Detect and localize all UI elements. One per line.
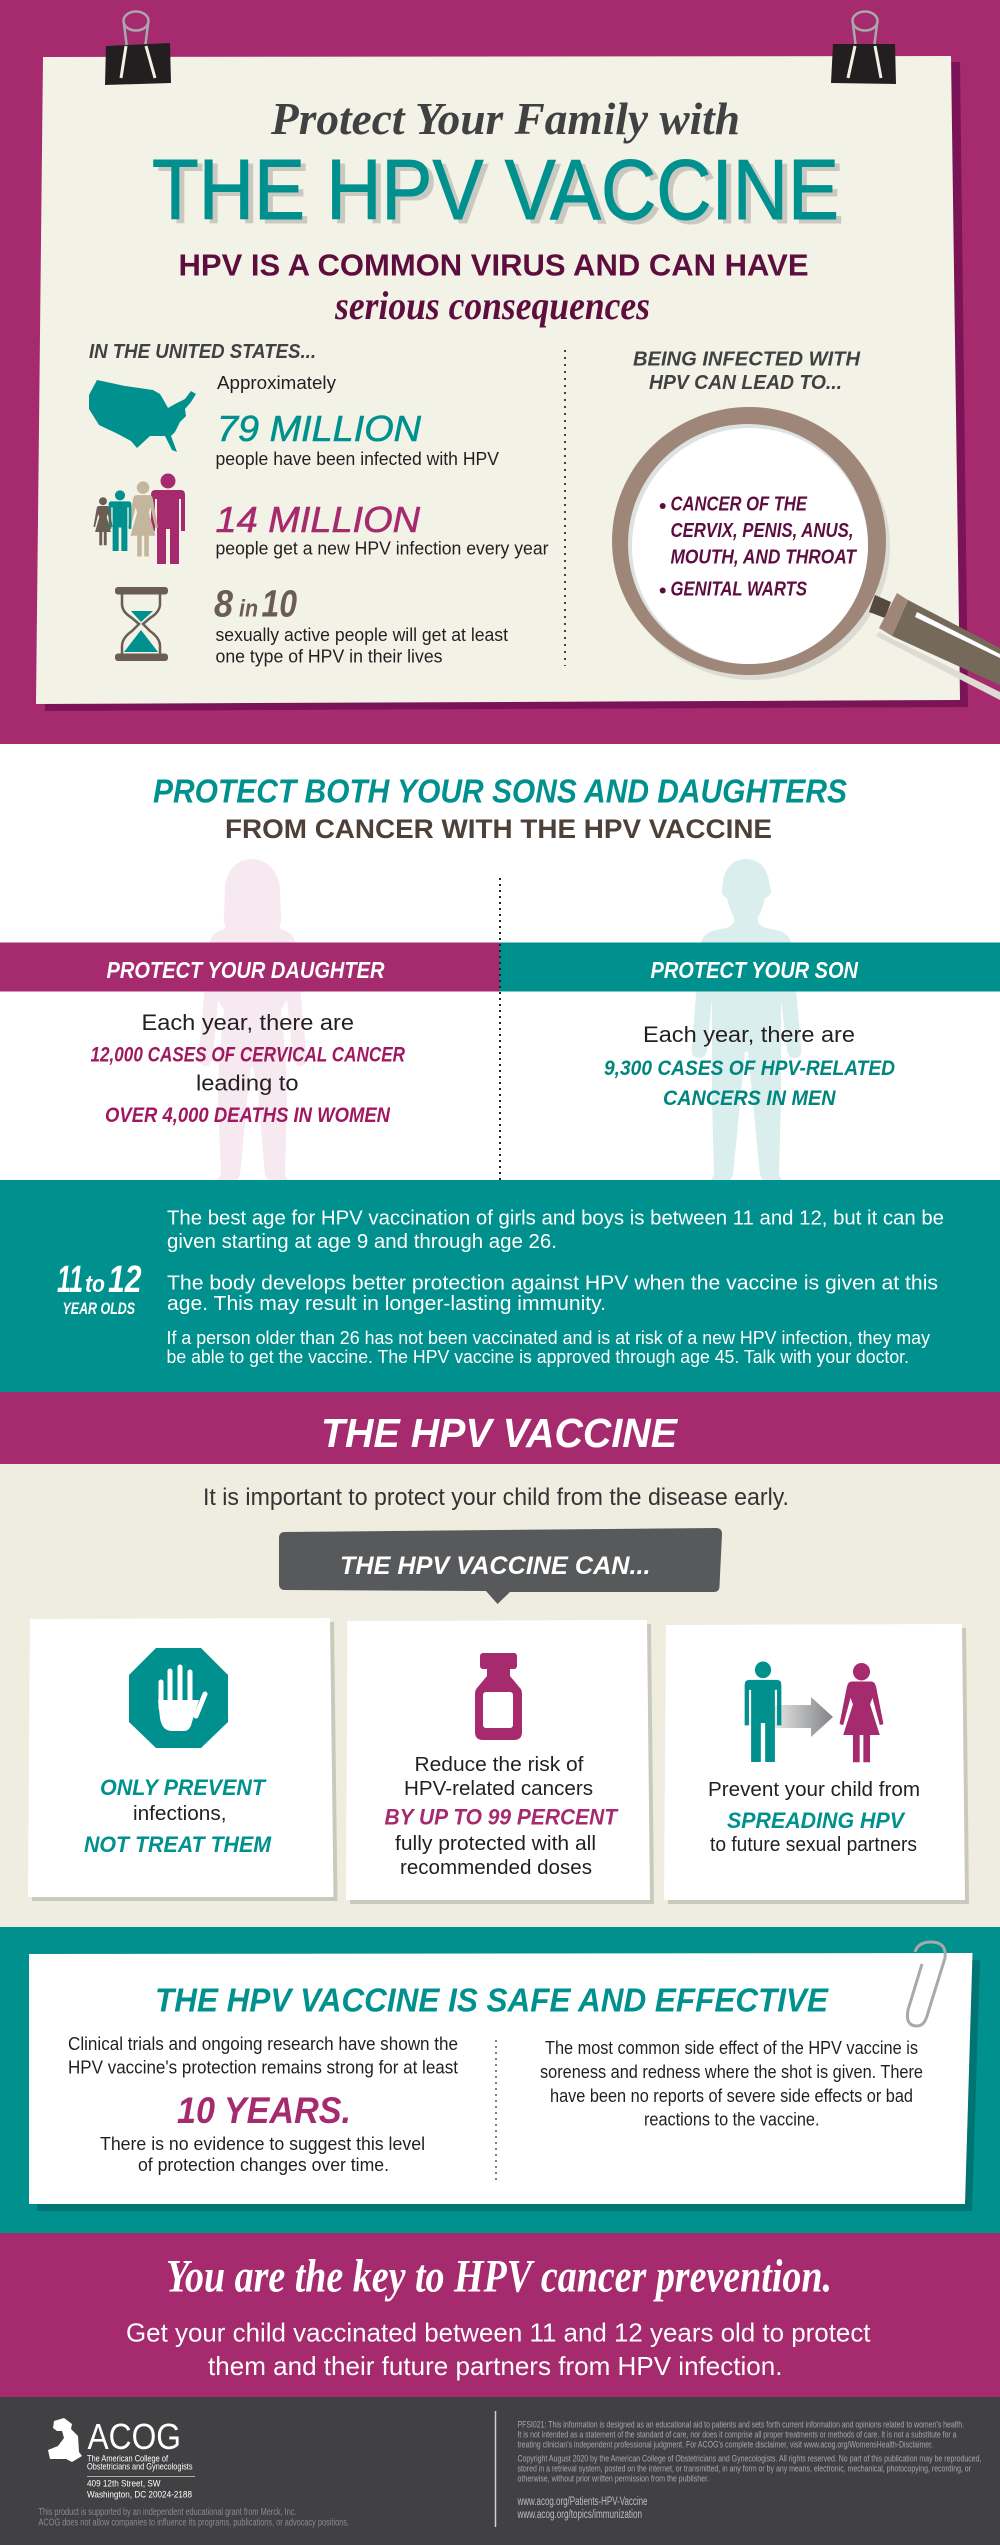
text: only prevent infections: infections, [133, 1803, 226, 1825]
text: son statistics: CANCERS IN MEN [663, 1087, 836, 1110]
text: better protection [167, 1272, 938, 1315]
stat: 14 million: 14 MILLION [216, 499, 421, 540]
icon: mother and child emblem [48, 2418, 82, 2462]
text: get your child vaccinated: them and their future partners from HPV infection. [208, 2351, 782, 2381]
stat: 11 to 12 year olds: YEAR OLDS [62, 1299, 135, 1318]
text: older than 26: be able to get the vaccine. The HPV vaccine is approved through age 45. Talk with your doctor. [166, 1347, 909, 1367]
subtitle: common virus: HPV IS A COMMON VIRUS AND CAN HAVE [178, 248, 809, 282]
logo: ACOG: 409 12th Street, SW [87, 2478, 161, 2490]
paper note [36, 56, 960, 704]
text: no evidence: There is no evidence to suggest this level [100, 2134, 425, 2154]
panel: protect both sons and daughters [0, 744, 1000, 1180]
title: The HPV Vaccine: THE HPV VACCINE [157, 147, 844, 242]
subtitle: serious consequences: serious consequences [334, 283, 650, 328]
icon: family of four [93, 474, 185, 564]
text: side effects: soreness and redness where the shot is given. There [540, 2062, 923, 2082]
text: sexually active people: one type of HPV in their lives [216, 646, 442, 666]
panel: you are the key [0, 2233, 1000, 2397]
text: son statistics [604, 1022, 895, 1110]
text: sponsorship note [38, 2507, 349, 2528]
icon: man passing to woman with arrow [745, 1662, 883, 1762]
text: clinical trials [68, 2034, 458, 2078]
icon: vaccine vial [475, 1653, 522, 1740]
band: protect your son: PROTECT YOUR SON [650, 957, 858, 983]
text: prevent spreading HPV: to future sexual partners [710, 1834, 917, 1856]
heading: safe and effective: THE HPV VACCINE IS SAFE AND EFFECTIVE [155, 1982, 829, 2018]
text: clinical trials: Clinical trials and ongoing research have shown the [68, 2034, 458, 2054]
text: son statistics: Each year, there are [643, 1022, 855, 1047]
text: consequences list: MOUTH, AND THROAT [670, 546, 858, 568]
stat: 11 to 12 year olds: 11 [57, 1259, 83, 1301]
text: consequences list: CANCER OF THE [670, 494, 808, 516]
text: get your child vaccinated [126, 2318, 871, 2381]
icon: right binder clip [831, 12, 896, 84]
text: side effects: The most common side effect of the HPV vaccine is [545, 2038, 918, 2058]
text: son statistics: 9,300 CASES OF HPV-RELATED [604, 1057, 895, 1080]
text: reduce risk by 99 percent: fully protected with all [395, 1833, 596, 1855]
text: sponsorship note: ACOG does not allow companies to influence its programs, publications, or advocacy positions. [38, 2518, 349, 2528]
text: get your child vaccinated: Get your child vaccinated between 11 and 12 years old to protect [126, 2318, 871, 2348]
text: consequences list: CERVIX, PENIS, ANUS, [670, 520, 854, 542]
text: approximately: Approximately [217, 373, 336, 393]
card: reduce the risk [346, 1620, 654, 1904]
text: reduce risk by 99 percent: recommended doses [400, 1857, 592, 1879]
stat: 8 in 10: in [239, 596, 258, 622]
stat: 11 to 12 year olds: 12 [108, 1259, 142, 1301]
callout: the HPV vaccine can: THE HPV VACCINE CAN... [340, 1552, 650, 1580]
text: web links: www.acog.org/topics/immunization [517, 2509, 642, 2521]
text: side effects [540, 2038, 923, 2130]
text: no evidence: of protection changes over time. [138, 2155, 389, 2175]
band: protect your daughter: PROTECT YOUR DAUGHTER [106, 957, 385, 983]
heading: being infected [633, 348, 861, 394]
subheading: from cancer: FROM CANCER WITH THE HPV VACCINE [225, 814, 772, 844]
text: only prevent infections: NOT TREAT THEM [84, 1832, 272, 1857]
panel: header on magenta background [0, 0, 1000, 744]
panel: what the vaccine can do [0, 1464, 1000, 1927]
icon: magnifying glass [612, 407, 1000, 700]
stat: 11 to 12 year olds [57, 1259, 142, 1318]
text: consequences list [660, 494, 858, 600]
card: only prevent [28, 1618, 338, 1901]
text: reduce risk by 99 percent: BY UP TO 99 PERCENT [384, 1804, 618, 1830]
logo: ACOG: Obstetricians and Gynecologists [87, 2462, 193, 2472]
text: better protection: age. This may result in longer-lasting immunity. [167, 1293, 606, 1315]
icon: map of the United States [89, 380, 196, 452]
logo: ACOG [48, 2416, 195, 2500]
text: daughter statistics [90, 1010, 406, 1127]
text: prevent spreading HPV [708, 1779, 920, 1856]
text: no evidence [100, 2134, 425, 2175]
text: sponsorship note: This product is supported by an independent educational grant from Merck, Inc. [38, 2507, 296, 2518]
logo: ACOG: Washington, DC 20024-2188 [87, 2490, 192, 2500]
icon: left binder clip [105, 12, 171, 85]
text: only prevent infections: ONLY PREVENT [100, 1775, 267, 1800]
text: daughter statistics: 12,000 CASES OF CERVICAL CANCER [90, 1044, 406, 1066]
text: reduce risk by 99 percent [384, 1754, 618, 1879]
stat: 79 million: 79 MILLION [217, 408, 422, 449]
panel: safe and effective [0, 1927, 1000, 2233]
card: prevent spreading [664, 1624, 969, 1904]
text: only prevent infections [84, 1775, 272, 1857]
text: disclaimer: otherwise, without prior written permission from the publisher. [518, 2474, 709, 2484]
text: older than 26 [166, 1328, 930, 1367]
band: protect your son [500, 942, 1000, 992]
heading: being infected: BEING INFECTED WITH [633, 348, 861, 370]
text: older than 26: If a person older than 26 has not been vaccinated and is at risk of a new HPV infection, they may [166, 1328, 930, 1348]
text: people infected: people have been infected with HPV [216, 449, 499, 469]
text: consequences list: GENITAL WARTS [670, 578, 808, 600]
text: reduce risk by 99 percent: Reduce the risk of [414, 1754, 584, 1776]
text: best age: given starting at age 9 and through age 26. [167, 1231, 557, 1253]
text: web links: www.acog.org/Patients-HPV-Vaccine [517, 2496, 648, 2508]
text: web links [517, 2496, 648, 2521]
icon: girl silhouette [198, 859, 307, 1180]
heading: being infected: HPV CAN LEAD TO... [649, 372, 842, 394]
text: better protection: The body develops better protection against HPV when the vaccine is given at this [167, 1272, 938, 1294]
stat: 11 to 12 year olds: to [85, 1271, 105, 1298]
text: prevent spreading HPV: Prevent your child from [708, 1779, 920, 1801]
icon: boy silhouette [692, 859, 801, 1180]
band: The HPV Vaccine heading: THE HPV VACCINE [321, 1410, 679, 1456]
heading: protect both: PROTECT BOTH YOUR SONS AND DAUGHTERS [153, 772, 847, 810]
text: prevent spreading HPV: SPREADING HPV [727, 1808, 906, 1833]
title: Protect Your Family with: Protect Your Family with [270, 93, 740, 144]
stat: 8 in 10: 10 [262, 584, 297, 626]
text: best age [167, 1208, 944, 1253]
text: sexually active people: sexually active people will get at least [216, 625, 508, 645]
text: daughter statistics: Each year, there are [142, 1010, 354, 1035]
icon: paperclip [907, 1942, 945, 2026]
text: sexually active people [216, 625, 508, 666]
title: The HPV Vaccine: THE HPV VACCINE [152, 143, 839, 238]
text: daughter statistics: OVER 4,000 DEATHS IN WOMEN [105, 1104, 391, 1127]
panel: best age for vaccination [0, 1180, 1000, 1392]
text: daughter statistics: leading to [196, 1070, 298, 1096]
icon: stop sign with hand [129, 1648, 228, 1748]
band: protect your daughter [0, 942, 500, 992]
text: important to protect: It is important to protect your child from the disease early. [203, 1484, 789, 1511]
band: The HPV Vaccine heading [0, 1392, 1000, 1464]
text: best age: The best age for HPV vaccination of girls and boys is between 11 and 12, but it can be [167, 1208, 944, 1230]
stat: 10 years: 10 YEARS. [177, 2090, 351, 2131]
logo: ACOG: ACOG [88, 2416, 181, 2457]
heading: you are the key: You are the key to HPV cancer prevention. [166, 2250, 832, 2302]
text: side effects: reactions to the vaccine. [644, 2110, 820, 2130]
heading: in the United States: IN THE UNITED STATES... [89, 341, 316, 363]
text: new infections: people get a new HPV infection every year [216, 538, 549, 558]
note card [29, 1953, 972, 2204]
icon: hourglass [115, 587, 168, 661]
text: clinical trials: HPV vaccine's protection remains strong for at least [68, 2058, 458, 2078]
text: side effects: have been no reports of severe side effects or bad [550, 2086, 913, 2106]
callout: the HPV vaccine can [279, 1528, 722, 1604]
stat: 8 in 10 [214, 584, 297, 626]
stat: 8 in 10: 8 [214, 584, 234, 626]
logo: ACOG: The American College of [87, 2454, 168, 2464]
text: reduce risk by 99 percent: HPV-related cancers [404, 1778, 593, 1800]
text: disclaimer [518, 2420, 982, 2484]
panel: footer [0, 2397, 1000, 2545]
